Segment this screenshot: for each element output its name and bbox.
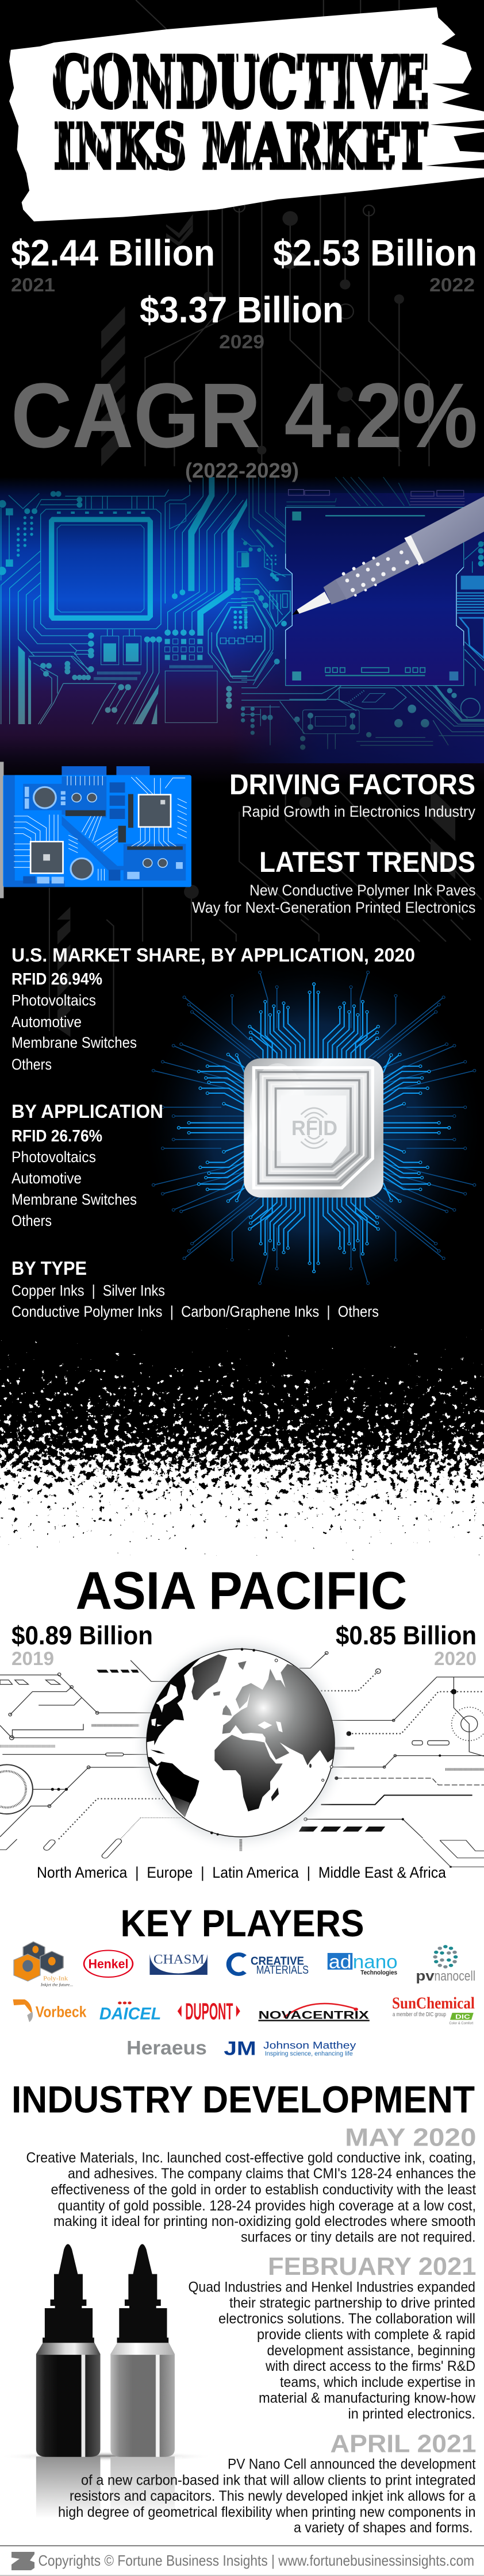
left board traces xyxy=(1,477,247,724)
circuit board hero image xyxy=(0,477,484,784)
development: February 2021 xyxy=(189,2252,476,2422)
bright side block xyxy=(461,576,484,590)
board base gradient xyxy=(0,477,484,784)
logo: Johnson Matthey: JM xyxy=(224,2038,256,2059)
reflection black bottle xyxy=(36,2456,101,2517)
panel body xyxy=(286,507,464,686)
pcb light pads xyxy=(25,787,183,883)
silver chip body xyxy=(244,1058,383,1198)
logo: Heraeus: Heraeus xyxy=(126,2037,207,2059)
pen grip xyxy=(335,541,418,599)
outer hexagon lines xyxy=(208,599,247,682)
pcb capacitors xyxy=(34,787,167,879)
logo: Sun Chemical: a member of the DIC group xyxy=(393,2012,446,2018)
logo: Sun Chemical: Color & Comfort xyxy=(449,2021,474,2025)
april line 5: a variety of shapes and forms. xyxy=(294,2520,473,2536)
pcb body xyxy=(3,775,191,887)
pcb bracket xyxy=(0,762,11,898)
square pads xyxy=(165,639,202,660)
value 2029: $3.37 Billion xyxy=(140,289,344,330)
header circuit background xyxy=(101,0,429,466)
latest trends xyxy=(192,846,476,916)
value 2020: $0.85 Billion xyxy=(336,1621,477,1650)
footer xyxy=(0,2546,484,2576)
type list line 1: Copper Inks | Silver Inks xyxy=(11,1282,165,1299)
pen ring xyxy=(404,536,424,566)
lower chip xyxy=(165,671,217,722)
february heading: FEBRUARY 2021 xyxy=(268,2252,476,2281)
logo: CHASM: CHASM xyxy=(153,1951,204,1966)
component boxes xyxy=(101,636,119,665)
pcb dark zones xyxy=(3,775,186,887)
logo: Johnson Matthey: Johnson Matthey xyxy=(263,2040,356,2051)
value 2019: $0.89 Billion xyxy=(11,1621,153,1650)
pen xyxy=(292,496,484,615)
inland seas xyxy=(258,1721,283,1763)
panel edge glow xyxy=(286,553,464,659)
hexagon component xyxy=(217,608,247,676)
traces right of chip xyxy=(165,477,247,630)
logo: Daicel xyxy=(99,2001,161,2023)
logo: adnano: Technologies xyxy=(360,1968,397,1976)
may heading: MAY 2020 xyxy=(345,2123,476,2152)
hatch strips xyxy=(94,667,213,679)
pcb blue pads xyxy=(23,782,125,883)
key player logos: DUPONT xyxy=(185,1999,233,2025)
traces left of chip xyxy=(1,507,90,724)
logo: adnano xyxy=(328,1951,398,1976)
other regions list: North America | Europe | Latin America | Middle East & Africa xyxy=(37,1864,447,1881)
round pads xyxy=(0,491,240,713)
globe rim markers xyxy=(210,1648,333,1836)
chip frame xyxy=(49,517,153,621)
chip center xyxy=(281,1095,347,1163)
year 2029: 2029 xyxy=(219,331,264,352)
US item membrane switches: Membrane Switches xyxy=(11,1034,137,1051)
south america xyxy=(156,1762,199,1817)
icon: FB logo xyxy=(11,2552,34,2570)
february line 3: electronics solutions. The collaboration will xyxy=(218,2310,475,2327)
year 2021: 2021 xyxy=(11,274,55,295)
logo: Sun Chemical: DIC xyxy=(455,2013,470,2020)
traces above chip xyxy=(9,490,168,559)
bottom circuit lines under globe xyxy=(0,1838,484,1867)
development: May 2020 xyxy=(26,2123,476,2245)
february line 9: in printed electronics. xyxy=(348,2406,475,2422)
logo: Sun Chemical xyxy=(392,1994,475,2025)
by type heading: BY TYPE xyxy=(11,1258,87,1279)
pcb angled trace band xyxy=(62,816,185,870)
pen cone xyxy=(324,579,347,605)
small outlined squares xyxy=(57,504,247,660)
logo: Henkel: Henkel xyxy=(89,1958,128,1971)
pads xyxy=(241,541,484,750)
right traces xyxy=(460,618,484,658)
by application heading: BY APPLICATION xyxy=(11,1101,163,1122)
value 2021: $2.44 Billion xyxy=(11,232,215,274)
application RFID share: RFID 26.76% xyxy=(11,1127,102,1145)
logo: Johnson Matthey xyxy=(224,2038,356,2059)
left thick strips xyxy=(18,645,159,724)
south america tip xyxy=(171,1795,190,1817)
chip top pads xyxy=(57,512,145,514)
svalbard xyxy=(238,1661,247,1670)
dot grid xyxy=(17,516,248,629)
continents xyxy=(145,1654,337,1817)
chip glow xyxy=(141,955,484,1301)
segmentation text block xyxy=(11,944,415,1320)
top traces xyxy=(286,477,410,506)
year 2019: 2019 xyxy=(11,1648,54,1669)
logo: NovaCentrix: NOVACENTRIX xyxy=(258,2008,370,2021)
eurasia xyxy=(222,1664,337,1766)
greenland xyxy=(191,1654,227,1700)
circuit traces xyxy=(153,972,474,1283)
key player logos xyxy=(13,1941,475,2059)
pcb white traces xyxy=(14,776,187,881)
panel corner square lower left xyxy=(292,671,301,680)
chip highlight xyxy=(250,1063,306,1151)
US item others: Others xyxy=(11,1056,52,1073)
grip dots xyxy=(342,551,409,597)
logo: Poly-Ink: Inkjet the future... xyxy=(40,1982,73,1987)
chip outline xyxy=(41,509,161,629)
display panel xyxy=(286,507,464,686)
globe xyxy=(130,1632,351,1853)
madagascar xyxy=(271,1787,279,1801)
panel rules xyxy=(325,516,425,675)
left board filled parts xyxy=(0,477,248,724)
white brush stroke xyxy=(9,7,484,221)
logo: Henkel xyxy=(84,1950,133,1977)
logo: Daicel: DAICEL xyxy=(99,2005,161,2023)
market size figures xyxy=(11,232,478,467)
black bottle xyxy=(36,2244,101,2457)
US item automotive: Automotive xyxy=(11,1013,82,1031)
gray bottle xyxy=(110,2244,175,2457)
right board filled parts xyxy=(241,541,484,750)
right board traces xyxy=(241,477,484,749)
logo: Creative Materials: CREATIVE xyxy=(251,1954,304,1968)
sri lanka xyxy=(309,1764,312,1768)
panel corner square lower right xyxy=(450,671,458,680)
component fills xyxy=(6,508,139,662)
RFID chip illustration xyxy=(141,955,484,1301)
rfid waves xyxy=(301,1108,327,1148)
globe halo xyxy=(130,1632,351,1853)
antenna coil xyxy=(253,1068,372,1188)
logo: NovaCentrix xyxy=(258,2004,370,2021)
US market share heading: U.S. MARKET SHARE, BY APPLICATION, 2020 xyxy=(11,944,415,966)
february line 4: provide clients with complete & rapid xyxy=(257,2327,475,2343)
application item photovoltaics: Photovoltaics xyxy=(11,1148,96,1166)
icon: blue printed circuit board xyxy=(0,762,191,898)
africa xyxy=(214,1735,283,1812)
caribbean xyxy=(147,1750,165,1766)
logo: Creative Materials: MATERIALS xyxy=(256,1963,309,1977)
year 2022: 2022 xyxy=(429,274,475,295)
asia pacific heading: ASIA PACIFIC xyxy=(76,1561,407,1621)
reflection gray bottle xyxy=(110,2456,175,2517)
icon: ink bottles xyxy=(0,2244,214,2518)
february line 8: material & manufacturing know-how xyxy=(259,2390,476,2406)
logo: CHASM xyxy=(149,1951,208,1975)
panel small rectangles xyxy=(325,668,425,672)
asia pacific circuit lines xyxy=(0,1651,484,1839)
pcb chip 2 xyxy=(30,841,63,873)
logo: DuPont xyxy=(178,1999,240,2025)
logo: Vorbeck xyxy=(13,2000,87,2022)
white lower page background xyxy=(0,1517,484,2576)
pcb connectors xyxy=(62,766,149,776)
year 2020: 2020 xyxy=(434,1648,477,1669)
pcb chip 2 marker xyxy=(43,854,50,860)
logo: Creative Materials xyxy=(229,1954,309,1977)
bottom traces xyxy=(241,686,484,749)
drivers section lower background lines xyxy=(49,920,471,1037)
US RFID share: RFID 26.94% xyxy=(11,970,102,989)
application item automotive: Automotive xyxy=(11,1170,82,1187)
asia pacific figures xyxy=(11,1621,477,1669)
driving factors xyxy=(229,768,475,820)
ground shadow xyxy=(0,2451,214,2462)
side component xyxy=(270,591,290,626)
value 2022: $2.53 Billion xyxy=(273,232,477,274)
logo: Johnson Matthey: Inspiring science, enhancing life xyxy=(265,2050,353,2057)
traces left of panel xyxy=(241,477,291,688)
RFID chip label: RFID xyxy=(291,1116,337,1140)
logo: pvnanocell: pv xyxy=(416,1968,435,1984)
logo: adnano: nano xyxy=(353,1951,398,1973)
panel corner squares xyxy=(292,512,301,521)
traces below xyxy=(40,629,159,724)
logo: adnano: ad xyxy=(329,1951,352,1973)
february line 2: their strategic partnership to drive printed xyxy=(229,2295,475,2311)
key players heading: KEY PLAYERS xyxy=(121,1902,364,1944)
globe ocean xyxy=(147,1649,335,1837)
ink splatter transition xyxy=(0,1322,484,1563)
logo: Poly-Ink: Poly-Ink xyxy=(43,1975,68,1982)
drivers section circuit background xyxy=(49,788,482,920)
application item membrane switches: Membrane Switches xyxy=(11,1191,137,1208)
type list line 2: Conductive Polymer Inks | Carbon/Graphene Inks | Others xyxy=(11,1303,379,1320)
pen barrel xyxy=(406,496,484,564)
US item photovoltaics: Photovoltaics xyxy=(11,992,96,1009)
hudson bay xyxy=(156,1684,178,1713)
forecast period: (2022-2029) xyxy=(185,459,299,482)
pen nib xyxy=(297,591,331,614)
pcb chip 1 marker xyxy=(160,800,165,804)
title brush banner xyxy=(9,7,484,221)
right side navy tint xyxy=(230,493,484,763)
pcb chip 1 xyxy=(139,795,171,827)
pcb dark parts xyxy=(66,794,183,850)
logo: Poly-Ink xyxy=(14,1941,73,1987)
application item others: Others xyxy=(11,1212,52,1229)
april heading: APRIL 2021 xyxy=(330,2430,476,2458)
great lakes xyxy=(151,1718,162,1727)
side chip xyxy=(241,553,249,567)
hexagon xyxy=(241,605,265,671)
north america xyxy=(145,1656,203,1745)
iceland xyxy=(213,1691,220,1696)
logo: Vorbeck: Vorbeck xyxy=(36,2003,87,2020)
pen point xyxy=(292,610,299,615)
uk xyxy=(222,1705,232,1716)
reflection fade xyxy=(31,2456,182,2518)
thick bus traces xyxy=(188,477,247,636)
logo: pvnanocell xyxy=(416,1945,475,1984)
development: April 2021 xyxy=(58,2430,476,2536)
hexagon boxes xyxy=(220,638,244,644)
